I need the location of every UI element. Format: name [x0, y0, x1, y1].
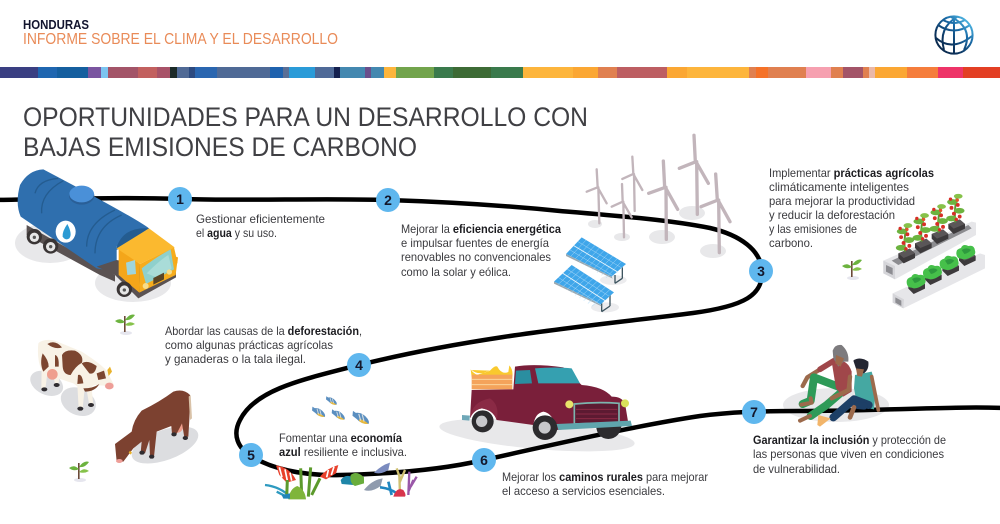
text: step 2: e impulsar fuentes de energía	[401, 237, 550, 250]
text: step 7: Garantizar la inclusión y protección de	[753, 434, 946, 447]
text: step 3: para mejorar la productividad	[769, 195, 915, 208]
text: step 6: el acceso a servicios esenciales.	[502, 485, 665, 498]
icon: spotted cow	[26, 340, 114, 421]
icon: two seated people	[800, 345, 878, 427]
text: step 3: y las emisiones de	[769, 223, 857, 236]
text: step 4: como algunas prácticas agrícolas	[165, 339, 333, 352]
header country label: HONDURAS	[23, 17, 89, 32]
text: step 1: Gestionar eficientemente	[196, 213, 325, 226]
step 1 marker: 1	[176, 191, 184, 207]
text: step 6: Mejorar los caminos rurales para mejorar	[502, 471, 708, 484]
step 6 marker: 6	[480, 452, 488, 468]
winding road line	[0, 198, 1000, 475]
text: step 2: renovables no convencionales	[401, 251, 551, 264]
text: step 3	[769, 167, 934, 250]
text: step 2: Mejorar la eficiencia energética	[401, 223, 562, 236]
step 4 marker	[347, 353, 371, 377]
text: step 6	[502, 471, 708, 498]
text: step 4: y ganaderas o la tala ilegal.	[165, 353, 306, 366]
text: step 3: carbono.	[769, 237, 813, 250]
step 4 marker: 4	[355, 357, 363, 373]
text: step 2: como la solar y eólica.	[401, 266, 511, 279]
icon: red pickup truck	[462, 365, 632, 440]
header report subtitle: INFORME SOBRE EL CLIMA Y EL DESARROLLO	[23, 31, 338, 48]
icon: wind turbines	[587, 135, 730, 253]
icon: seedling lower left	[69, 462, 89, 482]
step 7 marker: 7	[750, 404, 758, 420]
icon: seedling right	[842, 260, 862, 280]
step 5 marker	[239, 443, 263, 467]
step 2 marker	[376, 188, 400, 212]
step 3 marker	[749, 259, 773, 283]
step 5 marker: 5	[247, 447, 255, 463]
icon: fish school	[312, 396, 369, 424]
icon: brown cow	[115, 391, 203, 471]
main title: BAJAS EMISIONES DE CARBONO	[23, 132, 417, 162]
step 7 marker	[742, 400, 766, 424]
text: step 5: Fomentar una economía	[279, 432, 403, 445]
step 2 marker: 2	[384, 192, 392, 208]
icon: hydroponic crops	[883, 194, 985, 308]
text: step 2	[401, 223, 562, 279]
icon: seedling upper left	[115, 315, 135, 335]
text: step 7	[753, 434, 946, 476]
main title	[23, 102, 588, 162]
text: step 3: climáticamente inteligentes	[769, 181, 909, 194]
text: step 3: Implementar prácticas agrícolas	[769, 167, 934, 180]
text: step 5	[279, 432, 407, 459]
icon: solar panels	[554, 237, 627, 312]
main title: OPORTUNIDADES PARA UN DESARROLLO CON	[23, 102, 588, 132]
step 1 marker	[168, 187, 192, 211]
text: step 3: y reducir la deforestación	[769, 209, 895, 222]
icon: water tanker truck	[18, 169, 178, 298]
text: step 7: las personas que viven en condiciones	[753, 448, 944, 461]
illustration shadows under the road	[15, 206, 889, 457]
step 6 marker	[472, 448, 496, 472]
text: step 5: azul resiliente e inclusiva.	[279, 446, 407, 459]
multicolour ribbon	[0, 67, 1000, 78]
text: step 4: Abordar las causas de la deforestación,	[165, 325, 362, 338]
text: step 4	[165, 325, 362, 366]
text: step 1	[196, 213, 325, 240]
text: step 1: el agua y su uso.	[196, 227, 277, 240]
text: step 7: de vulnerabilidad.	[753, 463, 840, 476]
step 3 marker: 3	[757, 263, 765, 279]
icon: World Bank globe logo	[935, 16, 973, 54]
icon: coral reef and fish	[265, 463, 417, 499]
